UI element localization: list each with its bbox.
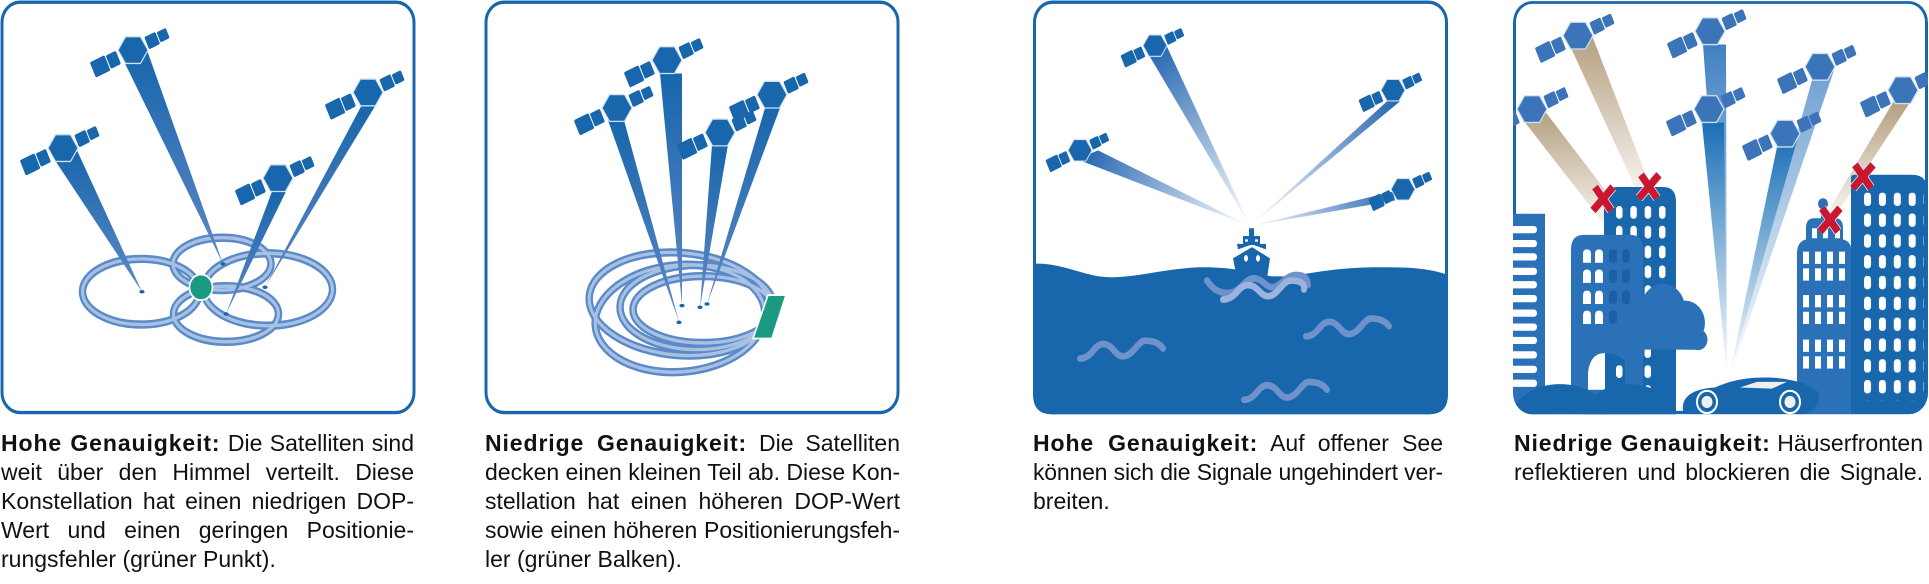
ship xyxy=(1233,228,1270,278)
text: panel 1 caption: Konstellation hat einen niedrigen DOP- xyxy=(1,488,414,514)
signal beams xyxy=(55,50,376,314)
left strip building xyxy=(1510,214,1545,414)
signal beams xyxy=(608,73,780,322)
text: panel 1 caption: Hohe Genauigkeit: Die Satelliten sind xyxy=(1,430,414,456)
illustrations xyxy=(0,0,1928,414)
signal beams xyxy=(1077,47,1400,226)
rings xyxy=(82,238,332,342)
panel: low accuracy, clustered satellites xyxy=(486,2,898,413)
middle right building xyxy=(1797,198,1852,414)
text: panel 2 caption: stellation hat einen höheren DOP-Wert xyxy=(485,488,900,514)
brown blocked signals xyxy=(1525,36,1910,223)
text: panel 3 caption: Hohe Genauigkeit: Auf offener See xyxy=(1033,430,1443,456)
text: panel 1 caption: weit über den Himmel verteilt. Diese xyxy=(1,459,414,485)
text: panel 2 caption: sowie einen höheren Positionierungsfeh- xyxy=(485,517,900,543)
green bar xyxy=(753,295,786,338)
text: panel 4 caption: Niedrige Genauigkeit: Häuserfronten xyxy=(1514,430,1923,456)
ground points xyxy=(676,302,710,324)
text: panel 4 caption xyxy=(1514,430,1923,485)
tall back building xyxy=(1604,187,1676,414)
text: panel 2 caption: Niedrige Genauigkeit: Die Satelliten xyxy=(485,430,900,456)
text: panel 1 caption xyxy=(1,430,414,572)
panel: low accuracy in city xyxy=(1513,1,1928,414)
text: panel 1 caption: Wert und einen geringen Positionie- xyxy=(1,517,414,543)
tree xyxy=(1643,284,1708,350)
satellites xyxy=(1489,6,1929,161)
satellites xyxy=(1045,26,1433,211)
satellites xyxy=(20,25,406,206)
panel: high accuracy, wide satellite spread xyxy=(2,2,414,413)
sea xyxy=(1033,264,1448,414)
text: panel 2 caption: decken einen kleinen Teil ab. Diese Kon- xyxy=(485,459,900,485)
text: panel 1 caption: rungsfehler (grüner Punkt). xyxy=(1,546,276,572)
blue signals xyxy=(1702,45,1834,377)
green point xyxy=(190,274,212,300)
text: panel 3 caption xyxy=(1033,430,1443,514)
waves xyxy=(1080,275,1389,400)
bushes xyxy=(1516,384,1675,414)
text: panel 3 caption: breiten. xyxy=(1033,488,1110,514)
red crosses xyxy=(1593,165,1873,232)
satellites xyxy=(574,35,810,160)
text: panel 2 caption xyxy=(485,430,900,572)
car xyxy=(1683,377,1819,414)
rings xyxy=(586,246,774,378)
text: panel 4 caption: reflektieren und blockieren die Signale. xyxy=(1514,459,1923,485)
tall right building xyxy=(1851,175,1928,414)
ground points xyxy=(139,262,268,316)
text: panel 2 caption: ler (grüner Balken). xyxy=(485,546,682,572)
text: panel 3 caption: können sich die Signale ungehindert ver- xyxy=(1033,459,1443,485)
front building with arch xyxy=(1571,235,1643,414)
panel: high accuracy at open sea xyxy=(1033,2,1448,414)
